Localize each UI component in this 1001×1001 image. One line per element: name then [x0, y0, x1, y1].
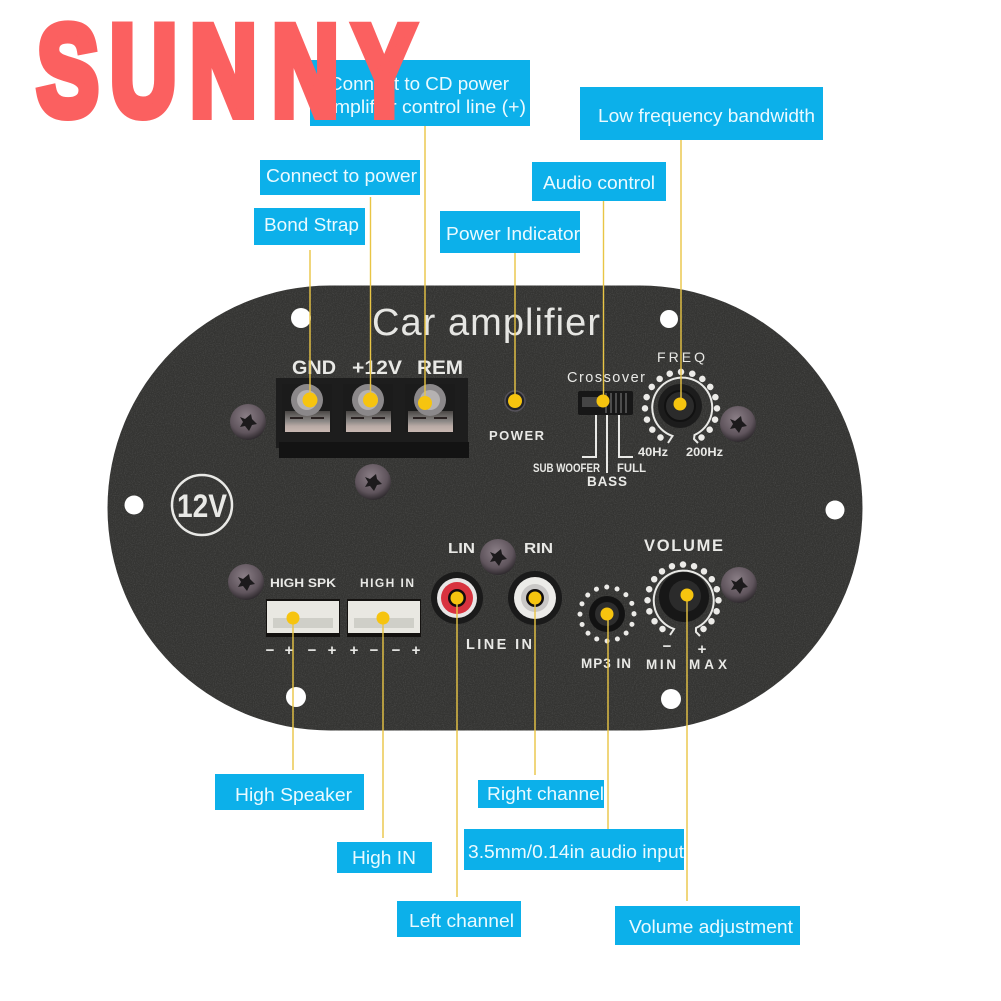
label: Connect to power [260, 160, 420, 195]
terminal labels [292, 357, 463, 379]
label: Connect to power: Connect to power [266, 165, 417, 186]
right RCA jack [508, 571, 562, 625]
label: Connect to CD power amplifier control line [310, 60, 530, 126]
screw: terminal left [230, 404, 266, 440]
panel: amplifier plate [108, 286, 862, 730]
label: Audio control [532, 162, 666, 201]
polarity marks: − [370, 642, 379, 659]
plate heading: Car amplifier: Car amplifier [372, 302, 600, 344]
screw: freq right [720, 406, 756, 442]
high in connector [347, 599, 421, 637]
FREQ range labels: 200Hz [686, 445, 723, 459]
terminal block [276, 378, 469, 458]
leader lines [293, 126, 687, 901]
label: Connect to CD power amplifier control line: Connect to CD power [329, 73, 509, 94]
screw: high spk left [228, 564, 264, 600]
label: Bond Strap [254, 208, 365, 245]
screw: terminal bottom [355, 464, 391, 500]
label: Volume adjustment [615, 906, 800, 945]
crossover slider switch [578, 391, 633, 415]
label: Left channel [397, 901, 521, 937]
LINE IN label: LINE IN [466, 637, 532, 653]
VOLUME label: VOLUME [644, 537, 723, 555]
label: Power Indicator [440, 211, 580, 253]
polarity marks: + [328, 642, 337, 659]
polarity marks [266, 642, 421, 659]
polarity marks: + [285, 642, 294, 659]
Crossover label: Crossover [567, 370, 645, 386]
crossover legends: SUB WOOFER [533, 461, 600, 475]
label: 3.5mm audio input [464, 829, 684, 870]
polarity marks: − [308, 642, 317, 659]
12V badge [172, 475, 232, 535]
brand title: Sunny: SUNNY [37, 0, 415, 143]
LIN label: LIN [448, 540, 475, 557]
high speaker connector [266, 599, 340, 637]
label: Right channel [478, 780, 604, 808]
FREQ range labels [638, 445, 723, 459]
VOLUME range labels [646, 638, 727, 672]
MP3 IN jack [580, 587, 634, 641]
12V badge: 12V [177, 488, 228, 524]
label: Low frequency bandwidth: Low frequency bandwidth [598, 105, 815, 126]
polarity marks: − [392, 642, 401, 659]
FREQ range labels: 40Hz [638, 445, 668, 459]
FREQ label: FREQ [657, 349, 705, 365]
HIGH IN label: HIGH IN [360, 576, 414, 590]
terminal labels: GND [292, 357, 336, 379]
terminal labels: +12V [352, 357, 402, 379]
VOLUME range labels: − [663, 638, 672, 655]
polarity marks: − [266, 642, 275, 659]
label: High IN: High IN [352, 847, 416, 868]
crossover switch legs [582, 415, 633, 473]
RIN label: RIN [524, 540, 553, 557]
label: Connect to CD power amplifier control line: amplifier control line (+) [323, 96, 526, 117]
label: Right channel: Right channel [487, 783, 604, 804]
label: High Speaker [215, 774, 364, 810]
label: Low frequency bandwidth [580, 87, 823, 140]
label: Bond Strap: Bond Strap [264, 214, 359, 235]
HIGH SPK label: HIGH SPK [270, 576, 336, 590]
label: Left channel: Left channel [409, 910, 514, 931]
label: Volume adjustment: Volume adjustment [629, 916, 793, 937]
label: 3.5mm audio input: 3.5mm/0.14in audio input [468, 841, 684, 862]
left RCA jack [431, 572, 483, 624]
label: Audio control: Audio control [543, 172, 655, 193]
crossover legends: FULL [617, 461, 646, 475]
label: Power Indicator: Power Indicator [446, 223, 580, 244]
power LED [505, 391, 525, 411]
screw: between line inputs [480, 539, 516, 575]
crossover legends: BASS [587, 474, 627, 489]
polarity marks: + [412, 642, 421, 659]
VOLUME dial [648, 565, 718, 636]
anchor dots [286, 392, 694, 624]
POWER label: POWER [489, 428, 545, 443]
crossover legends [533, 461, 646, 489]
label: High Speaker: High Speaker [235, 784, 352, 805]
VOLUME range labels: MIN [646, 657, 676, 672]
MP3 IN label: MP3 IN [581, 656, 631, 671]
terminal labels: REM [417, 357, 463, 379]
FREQ dial [645, 372, 717, 443]
VOLUME range labels: + [698, 641, 707, 658]
polarity marks: + [350, 642, 359, 659]
mounting holes [124, 308, 844, 709]
screw: volume right [721, 567, 757, 603]
label: High IN [337, 842, 432, 873]
VOLUME range labels: MAX [689, 657, 727, 672]
